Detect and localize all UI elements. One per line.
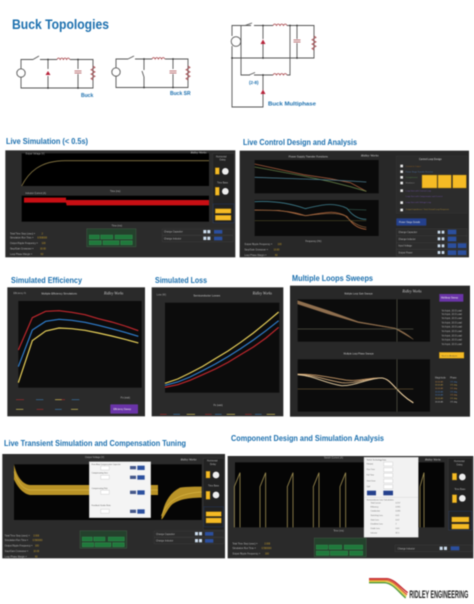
design dialog: Efficiency: [371, 506, 379, 508]
readouts: Loop Phase Margin =: [244, 254, 267, 257]
crossover table: 10.00 dB: [435, 388, 444, 390]
chart: efficiency curves: [18, 301, 142, 388]
crossover table: 10.00 dB: [435, 381, 444, 383]
panel: multiple loops sweeps: [290, 286, 470, 417]
readouts: Output Ripple Frequency =: [5, 545, 33, 548]
power stage button: [396, 218, 426, 226]
component rows: [154, 531, 224, 544]
chart: loop phase: [298, 352, 430, 412]
panel: live transient simulation: [2, 454, 225, 558]
panel: live simulation: [5, 150, 235, 257]
component rows: Change Inductor: [398, 238, 416, 241]
readouts: Output Ripple Frequency =: [10, 242, 39, 245]
sweep legend: Vo Input, 10.0 Load: [442, 334, 463, 337]
multiloop sweep button: [439, 294, 463, 302]
control loop design box: [396, 156, 467, 213]
sidebar: timing controls: Horizontal: [216, 155, 227, 158]
chart: switch current: Switch Current (A): [324, 456, 343, 459]
design dialog: Fall Time: [367, 475, 374, 477]
simulation buttons: [87, 229, 136, 247]
sidebar: timing controls: Delay: [220, 160, 226, 162]
control loop design box: Loop Gain with Voltage Loop: [406, 201, 432, 204]
readouts: 100: [265, 554, 270, 556]
component rows: [162, 229, 233, 242]
chart: output voltage: [14, 456, 202, 520]
readouts: 60: [41, 254, 44, 256]
crossover table: 10.00 dB: [435, 401, 444, 403]
readouts: 10.00: [274, 249, 280, 251]
sidebar: timing controls: Time Base: [217, 182, 229, 184]
control loop design box: Modulator: [406, 182, 415, 185]
readouts: Step/Gain Crossover =: [244, 248, 269, 251]
panel: live control: [240, 151, 469, 257]
logo mark: Ridley Works: [180, 457, 197, 461]
component row: [395, 545, 472, 552]
readouts: 0.500000: [262, 548, 272, 550]
sweep legend: Vo Input, 10.0 Load: [442, 309, 463, 312]
sidebar: timing controls: Delay: [457, 465, 463, 467]
control loop design box: Output Impedance / Total Closed Loop Response: [406, 208, 450, 211]
readouts: 2.000: [33, 536, 40, 538]
readouts: Step/Gain Crossover =: [5, 550, 29, 553]
label: Buck: Buck: [81, 93, 93, 99]
readouts: Output Ripple Frequency =: [232, 553, 261, 556]
crossover table: Magnitude: [435, 377, 447, 380]
power stage button: Power Stage Details: [399, 221, 421, 224]
title: Buck Topologies: Buck Topologies: [12, 17, 109, 32]
compensation dialog: Error Amp Compensation Capacitor: [92, 463, 121, 466]
compensation dialog: [89, 462, 151, 518]
design dialog: 0.01: [396, 515, 399, 517]
readouts: [5, 535, 43, 558]
sweep legend: Vo Input, 10.0 Load: [442, 343, 463, 346]
design dialog: Qgd: [367, 486, 370, 488]
crossover table: 171 deg: [450, 388, 457, 390]
design dialog: 0.02: [396, 519, 399, 521]
heading: Component Design and Simulation Analysis: Component Design and Simulation Analysis: [231, 433, 384, 443]
design dialog: Switch Technology Data: [367, 458, 387, 461]
sidebar: timing controls: Horizontal: [454, 460, 465, 463]
crossover table: 171 deg: [450, 401, 457, 403]
component rows: Output Power: [398, 251, 413, 254]
panel: component design: [228, 456, 473, 558]
design dialog: Deadtime Loss: [371, 523, 383, 526]
component rows: [396, 229, 467, 256]
readouts: 60: [275, 255, 278, 257]
logo mark: Ridley Works: [401, 289, 422, 293]
circuit: Buck: [17, 56, 95, 99]
readouts: 60: [35, 556, 38, 558]
readouts: 10.00: [33, 551, 40, 553]
heading: Live Control Design and Analysis: Live Control Design and Analysis: [243, 137, 357, 147]
back to analysis button: Back to Analysis: [442, 354, 457, 357]
panel: simulated loss: Semiconductor Losses: [193, 293, 221, 297]
design dialog: Rise Time: [367, 469, 375, 471]
readouts: Loop Phase Margin =: [10, 253, 33, 256]
panel title: Efficiency %: [13, 293, 26, 295]
chart: output voltage: Time (ms): [110, 191, 121, 193]
sidebar: timing controls: Time Base: [454, 489, 466, 491]
heading: Simulated Efficiency: Simulated Efficiency: [11, 275, 82, 285]
compensation dialog: Compensating Pole: [92, 487, 108, 490]
design dialog: 0.965: [396, 506, 400, 508]
design dialog: Inductor: [371, 531, 378, 534]
readouts: Total Time Step (usec) =: [5, 535, 30, 538]
sweep legend: [442, 309, 463, 346]
chart: loop gain: Multiple Loop Gain Sweeps: [344, 293, 374, 296]
component rows: Change Capacitor: [164, 231, 183, 234]
label: Buck Multiphase: Buck Multiphase: [268, 102, 316, 108]
logo mark: Ridley Works: [190, 151, 207, 155]
design dialog: Diode Loss: [371, 528, 380, 530]
control loop design box: Power Stage Transfer Function: [406, 170, 433, 173]
component rows: Change Capacitor: [398, 231, 417, 234]
compensation dialog: Compensating Zero: [92, 472, 108, 475]
chart: phase: [255, 200, 379, 236]
heading: Multiple Loops Sweeps: Multiple Loops Sweeps: [292, 273, 373, 283]
logo mark: Ridley Works: [252, 292, 273, 296]
sweep legend: Vo Input, 10.0 Load: [442, 321, 463, 324]
design dialog: 2: [396, 524, 397, 526]
axis label: Po (watt): [213, 404, 223, 407]
readouts: [232, 542, 272, 556]
control loop design box: Control to Output: [406, 165, 421, 168]
crossover table: [435, 377, 457, 403]
design dialog: 0.00: [396, 528, 399, 530]
component rows: Change Capacitor: [156, 533, 175, 536]
chart: inductor current: Inductor Current (A): [25, 192, 46, 195]
readouts: 100: [42, 243, 46, 245]
design dialog: 0.257: [396, 502, 400, 504]
crossover table: 10.00 dB: [435, 385, 444, 387]
heading: Simulated Loss: Simulated Loss: [155, 275, 207, 285]
component rows: Input Voltage: [398, 245, 413, 248]
logo swoosh: [369, 579, 408, 598]
panel title: Loss (W): [157, 295, 166, 297]
efficiency sweep button: Efficiency Sweep: [113, 409, 132, 411]
design dialog: 92.5: [396, 532, 399, 534]
label: Buck SR: Buck SR: [170, 91, 191, 97]
readouts: [244, 243, 282, 257]
chart: switch current: [234, 456, 444, 533]
sidebar: timing controls: Time Base: [208, 486, 220, 488]
component rows: Change Inductor: [156, 540, 173, 543]
readouts: Output Ripple Frequency =: [244, 243, 273, 246]
chart: output voltage: Output Voltage (V): [25, 153, 45, 156]
design dialog: Gate Drive: [367, 479, 375, 482]
crossover table: 10.00 dB: [435, 395, 444, 397]
heading: Live Simulation: Live Simulation (< 0.5s): [6, 136, 88, 146]
axis label: Frequency (Hz): [305, 240, 322, 243]
circuit: Buck Multiphase: [231, 23, 316, 108]
chart: loss curves: [165, 303, 279, 393]
logo: Ridley Engineering: [369, 579, 468, 601]
legend: [160, 413, 275, 415]
panel: simulated efficiency: Multiple Efficiency Simulations: [41, 291, 78, 295]
readouts: Step/Gain Crossover =: [10, 247, 34, 250]
control loop design box: Loop Gain with Compensator and Current: [406, 195, 443, 198]
readouts: 10.00: [40, 248, 47, 250]
crossover table: 10.00 dB: [435, 391, 444, 393]
sweep legend: Vo Input, 10.0 Load: [442, 339, 463, 342]
readouts: 2.000: [264, 543, 271, 545]
crossover table: 10.00 dB: [435, 398, 444, 400]
design dialog: Gate Loss: [371, 518, 379, 521]
chart: loop gain: [298, 293, 430, 342]
readouts: Simulation Run Time =: [5, 539, 29, 542]
design dialog: 0.080: [396, 510, 400, 512]
logo mark: Ridley Works: [103, 291, 124, 295]
label: phase count: (2-8): [249, 80, 259, 85]
readouts: 100: [35, 546, 40, 548]
readouts: 0.500000: [33, 540, 43, 542]
logo mark: Ridley Works: [360, 154, 379, 158]
component row: Change Inductor: [398, 547, 415, 550]
simulation buttons: [314, 538, 366, 557]
back to analysis button: [439, 352, 464, 358]
crossover table: 171 deg: [450, 385, 457, 387]
control loop design box: Loop Gain with Current Loop: [406, 189, 432, 192]
design dialog: Total Losses: [371, 501, 381, 504]
multiloop sweep button: Multiloop Sweep: [441, 297, 459, 300]
chart: output voltage: [22, 153, 209, 193]
legend: [16, 400, 79, 409]
chart: gain: [255, 160, 379, 193]
readouts: Simulation Run Time =: [232, 547, 256, 550]
crossover table: 171 deg: [450, 395, 457, 397]
crossover table: 171 deg: [450, 398, 457, 400]
design dialog: Semiconductor Loss Calculations: [367, 498, 394, 501]
chart: output voltage: Output Voltage (V): [85, 456, 104, 459]
chart: inductor current: Time (ms): [112, 226, 122, 228]
sidebar: timing controls: [213, 153, 234, 223]
control loop design box: Control Loop Design: [419, 158, 442, 161]
chart: switch current: Time (ms): [333, 531, 344, 533]
readouts: 2: [42, 233, 44, 235]
control loop design box: Compensator: [406, 176, 418, 179]
crossover table: Phase: [450, 378, 457, 380]
panel: simulated loss: [152, 287, 283, 416]
circuit: Buck SR: [112, 56, 191, 97]
readouts: [10, 232, 48, 256]
compensation dialog: Feedback Divider Ratio: [92, 504, 111, 507]
logo mark: Ridley Works: [424, 457, 442, 461]
design dialog: Conduction: [371, 509, 380, 512]
sweep legend: Vo Input, 10.0 Load: [442, 313, 463, 316]
design dialog: Rds(on): [367, 464, 374, 466]
sweep legend: Vo Input, 10.0 Load: [442, 330, 463, 333]
axis label: Po (watt): [121, 397, 130, 400]
readouts: 0.500000: [37, 238, 48, 240]
sidebar: timing controls: Delay: [210, 464, 217, 466]
sidebar: timing controls: [203, 458, 224, 530]
sweep legend: Vo Input, 10.0 Load: [442, 326, 463, 329]
crossover table: 171 deg: [450, 381, 457, 383]
readouts: Total Time Step (usec) =: [10, 232, 36, 235]
chart: loop phase: Multiple Loop Phase Sweeps: [344, 352, 375, 355]
chart: inductor current: [22, 192, 209, 228]
component rows: Change Inductor: [164, 237, 181, 240]
panel: simulated efficiency: [7, 287, 145, 416]
sidebar: timing controls: Horizontal: [207, 459, 218, 462]
readouts: 100: [278, 244, 282, 246]
simulation buttons: [80, 531, 127, 548]
design dialog: Switching Loss: [371, 514, 383, 517]
panel title: Power Supply Transfer Functions: [289, 154, 328, 158]
sweep legend: Vo Input, 10.0 Load: [442, 317, 463, 320]
sidebar: timing controls: [448, 458, 472, 530]
readouts: Loop Phase Margin =: [5, 555, 28, 558]
crossover table: 171 deg: [450, 391, 457, 393]
readouts: Simulation Run Time =: [10, 237, 34, 240]
readouts: Total Time Step (usec) =: [232, 542, 258, 545]
design dialog: [364, 457, 418, 537]
heading: Live Transient Simulation: Live Transient Simulation and Compensation Tuning: [4, 438, 186, 448]
